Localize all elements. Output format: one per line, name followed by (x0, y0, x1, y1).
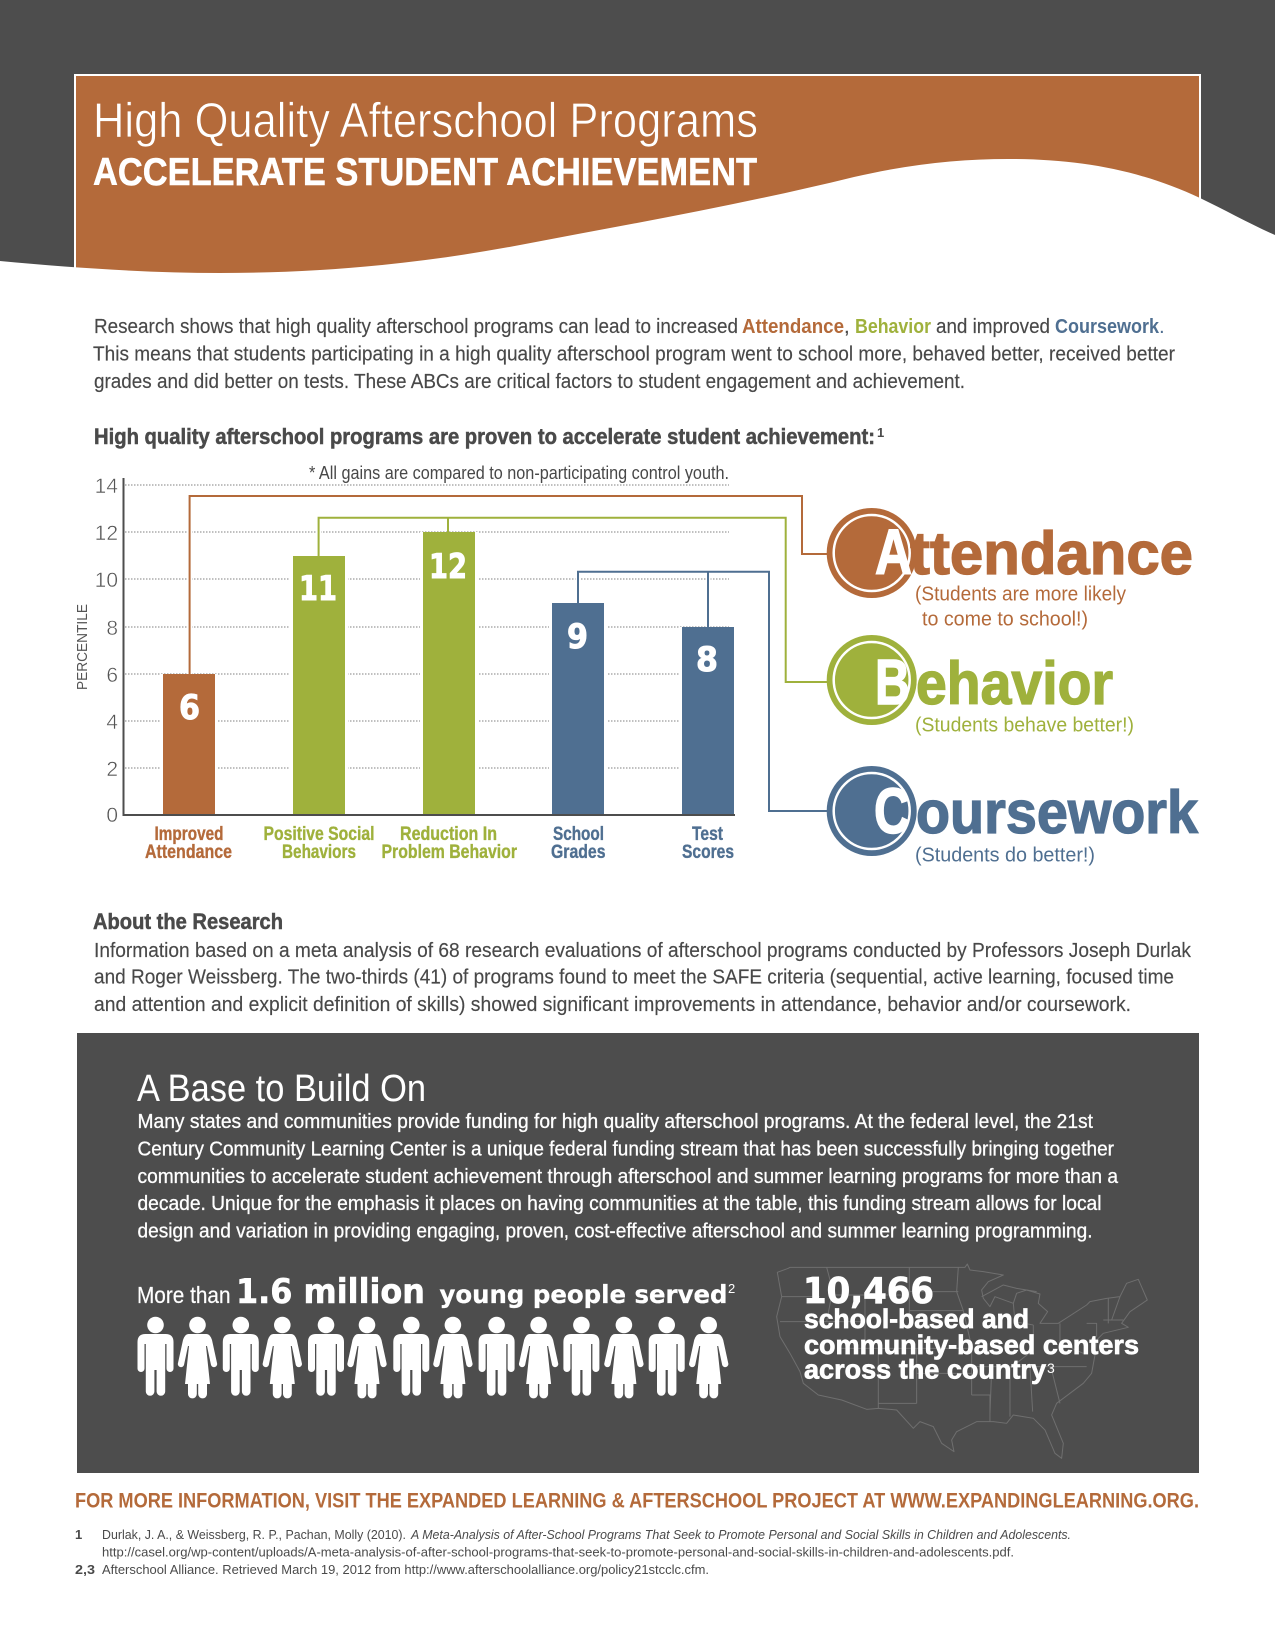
chart heading: 1 (877, 425, 884, 440)
badge: behavior: (Students behave better!) (915, 714, 1134, 736)
stat: centers across the country: community-based centers (804, 1330, 1139, 1360)
about the research: and Roger Weissberg. The two-thirds (41) of programs found to meet the SAFE criteria (sequential, active learning, focused time (94, 966, 1174, 988)
panel body text: communities to accelerate student achievement through afterschool and summer learning programs for more than a (138, 1165, 1119, 1188)
header banner (0, 75, 1275, 320)
about the research: and attention and explicit definition of skills) showed significant improvements in attendance, behavior and/or coursework. (94, 993, 1131, 1016)
title: High Quality Afterschool Programs (93, 94, 758, 148)
bar: school grades: 9 (567, 617, 588, 657)
footnotes: A Meta-Analysis of After-School Programs That Seek to Promote Personal and Social Skills in Children and Adolescents. (410, 1527, 1071, 1542)
bar: positive social behaviors: 11 (299, 569, 337, 609)
badge: behavior: ehavior (916, 650, 1113, 717)
x axis labels: Test (692, 824, 724, 845)
stat: young people served: 2 (728, 1281, 735, 1296)
footnotes: Durlak, J. A., & Weissberg, R. P., Pachan, Molly (2010). (102, 1527, 406, 1542)
header background (0, 0, 1275, 300)
stat: centers across the country: school-based and (804, 1304, 1029, 1334)
footnotes (75, 1527, 1071, 1577)
y axis labels: 4 (106, 711, 118, 734)
badge: attendance (830, 511, 1193, 630)
badge: attendance: to come to school!) (922, 608, 1088, 630)
x axis labels (145, 824, 734, 863)
x axis labels: School (553, 824, 604, 845)
footnotes: Afterschool Alliance. Retrieved March 19, 2012 from http://www.afterschoolalliance.org/policy21stcclc.cfm. (102, 1562, 709, 1577)
bar: school grades (552, 603, 604, 814)
badge: coursework: (Students do better!) (915, 844, 1095, 866)
bar: test scores: 8 (696, 640, 718, 680)
map of the united states (777, 1264, 1147, 1458)
panel heading: A Base to Build On (137, 1068, 426, 1110)
bar: positive social behaviors (293, 556, 345, 814)
x axis labels: Problem Behavior (382, 842, 518, 863)
about the research: Information based on a meta analysis of 68 research evaluations of afterschool programs conducted by Professors Joseph Durlak (94, 939, 1192, 962)
title: ACCELERATE STUDENT ACHIEVEMENT (93, 151, 757, 194)
intro paragraph: Behavior (855, 315, 931, 338)
axes (124, 478, 735, 815)
title (93, 94, 758, 194)
x axis labels: Positive Social (264, 824, 374, 845)
intro paragraph: , (844, 315, 850, 338)
about the research (93, 909, 1192, 1016)
x axis labels: Attendance (145, 842, 232, 863)
stat: young people served: young people served (440, 1280, 728, 1309)
intro paragraph: This means that students participating in a high quality afterschool program went to school more, behaved better, received better (93, 342, 1175, 366)
x axis labels: Reduction In (400, 824, 497, 845)
about the research: About the Research (93, 909, 283, 934)
footnotes: http://casel.org/wp-content/uploads/A-meta-analysis-of-after-school-programs-that-seek-to-promote-personal-and-social-skills-in-children-and-adolescents.pdf. (102, 1544, 1014, 1560)
panel body text: decade. Unique for the emphasis it places on having communities at the table, this funding stream allows for local (138, 1192, 1102, 1215)
panel body text (138, 1110, 1119, 1242)
y axis title: PERCENTILE (74, 604, 91, 690)
intro paragraph: . (1159, 315, 1165, 338)
y axis labels: 10 (95, 569, 118, 592)
x axis labels: Scores (682, 842, 734, 863)
chart note: * All gains are compared to non-participating control youth. (309, 463, 729, 483)
bar: improved attendance: 6 (179, 688, 200, 728)
badge: coursework: oursework (916, 779, 1199, 846)
stat: centers across the country: across the country (804, 1354, 1046, 1384)
panel body text: Many states and communities provide funding for high quality afterschool programs. At the federal level, the 21st (138, 1110, 1093, 1133)
connector: attendance (190, 496, 830, 674)
badge: coursework (830, 769, 1199, 866)
stat: centers across the country: 3 (1047, 1360, 1055, 1376)
stat: centers across the country (803, 1271, 1139, 1384)
stat: centers across the country: 10,466 (803, 1271, 934, 1312)
intro paragraph: and improved (936, 315, 1050, 338)
stat: young people served: 1.6 million (236, 1272, 425, 1312)
footnotes: 1 (75, 1527, 82, 1542)
connector: behavior (319, 518, 830, 682)
y axis labels: 0 (106, 804, 118, 827)
bar chart (74, 475, 737, 863)
y axis labels: 6 (106, 664, 118, 687)
panel: a base to build on (77, 1033, 1199, 1473)
footnotes: 2,3 (75, 1562, 95, 1577)
intro paragraph: Coursework (1055, 315, 1160, 338)
x axis labels: Grades (551, 842, 606, 863)
badge: behavior (830, 638, 1134, 736)
intro paragraph (93, 315, 1175, 393)
x axis labels: Improved (154, 824, 224, 845)
bar: test scores (682, 627, 734, 814)
bar: improved attendance (163, 674, 215, 814)
badge: coursework: C (874, 775, 910, 847)
panel body text: design and variation in providing engaging, proven, cost-effective afterschool and summer learning programming. (138, 1220, 1092, 1242)
intro paragraph: grades and did better on tests. These ABCs are critical factors to student engagement and achievement. (94, 370, 965, 393)
y axis labels: 8 (106, 617, 118, 640)
badge: attendance: A (875, 516, 912, 588)
people icons (138, 1317, 728, 1398)
intro paragraph: Attendance (742, 315, 844, 338)
bar: reduction in problem behavior (423, 532, 475, 814)
stat: young people served: More than (137, 1282, 230, 1308)
connector: coursework (578, 572, 830, 811)
y axis labels: 12 (95, 522, 118, 545)
intro paragraph: Research shows that high quality afterschool programs can lead to increased (94, 315, 738, 338)
x axis labels: Behaviors (282, 842, 356, 863)
badge: attendance: (Students are more likely (915, 584, 1126, 606)
badge: behavior: B (875, 646, 910, 718)
y axis labels (95, 475, 118, 827)
badge: attendance: ttendance (910, 520, 1193, 587)
y axis labels: 14 (95, 475, 118, 498)
chart heading: High quality afterschool programs are proven to accelerate student achievement: (94, 424, 875, 449)
stat: young people served (137, 1272, 735, 1312)
y axis labels: 2 (106, 758, 118, 781)
bar: reduction in problem behavior: 12 (429, 547, 467, 587)
panel body text: Century Community Learning Center is a unique federal funding stream that has been successfully bringing together (138, 1138, 1114, 1160)
